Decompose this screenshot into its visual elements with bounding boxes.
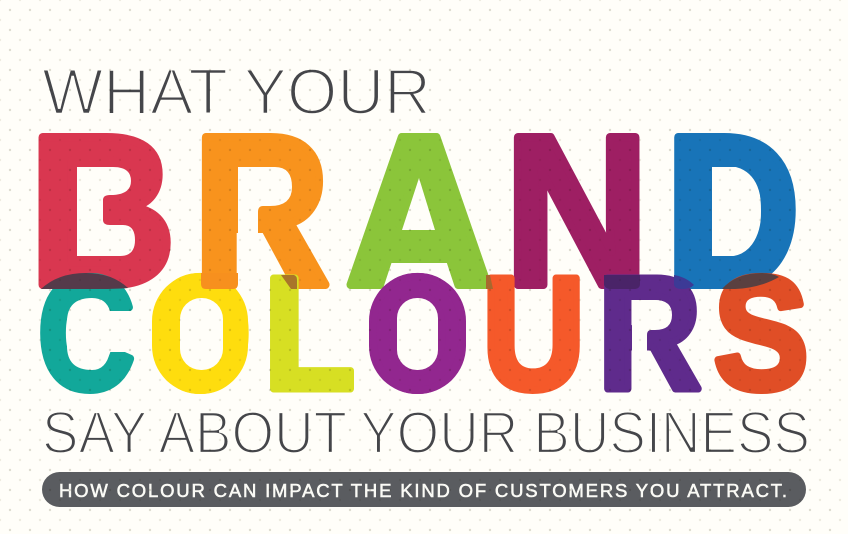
letter S: S xyxy=(714,245,809,424)
letter B: B xyxy=(29,92,176,331)
letter overlaps xyxy=(41,273,779,289)
letter A: A xyxy=(346,92,493,331)
letter R: R xyxy=(193,91,330,330)
letter O yellow: O xyxy=(150,243,251,423)
brand letter counters xyxy=(70,150,772,290)
letter N: N xyxy=(504,90,649,330)
letter U: U xyxy=(482,245,585,424)
heading: say about your business: SAY ABOUT YOUR BUSINESS xyxy=(42,400,810,466)
wordmark: colours xyxy=(38,243,809,424)
letter C: C xyxy=(38,244,135,423)
letter R purple: R xyxy=(598,244,701,424)
letter O purple: O xyxy=(368,243,467,423)
subtitle text: HOW COLOUR CAN IMPACT THE KIND OF CUSTOMERS YOU ATTRACT. xyxy=(59,480,787,501)
letter L: L xyxy=(264,243,355,423)
heading: what your: WHAT YOUR xyxy=(42,55,431,128)
subtitle banner xyxy=(42,472,806,507)
letter D: D xyxy=(666,90,800,331)
colours letter counters xyxy=(67,298,672,392)
wordmark: brand xyxy=(29,90,800,331)
